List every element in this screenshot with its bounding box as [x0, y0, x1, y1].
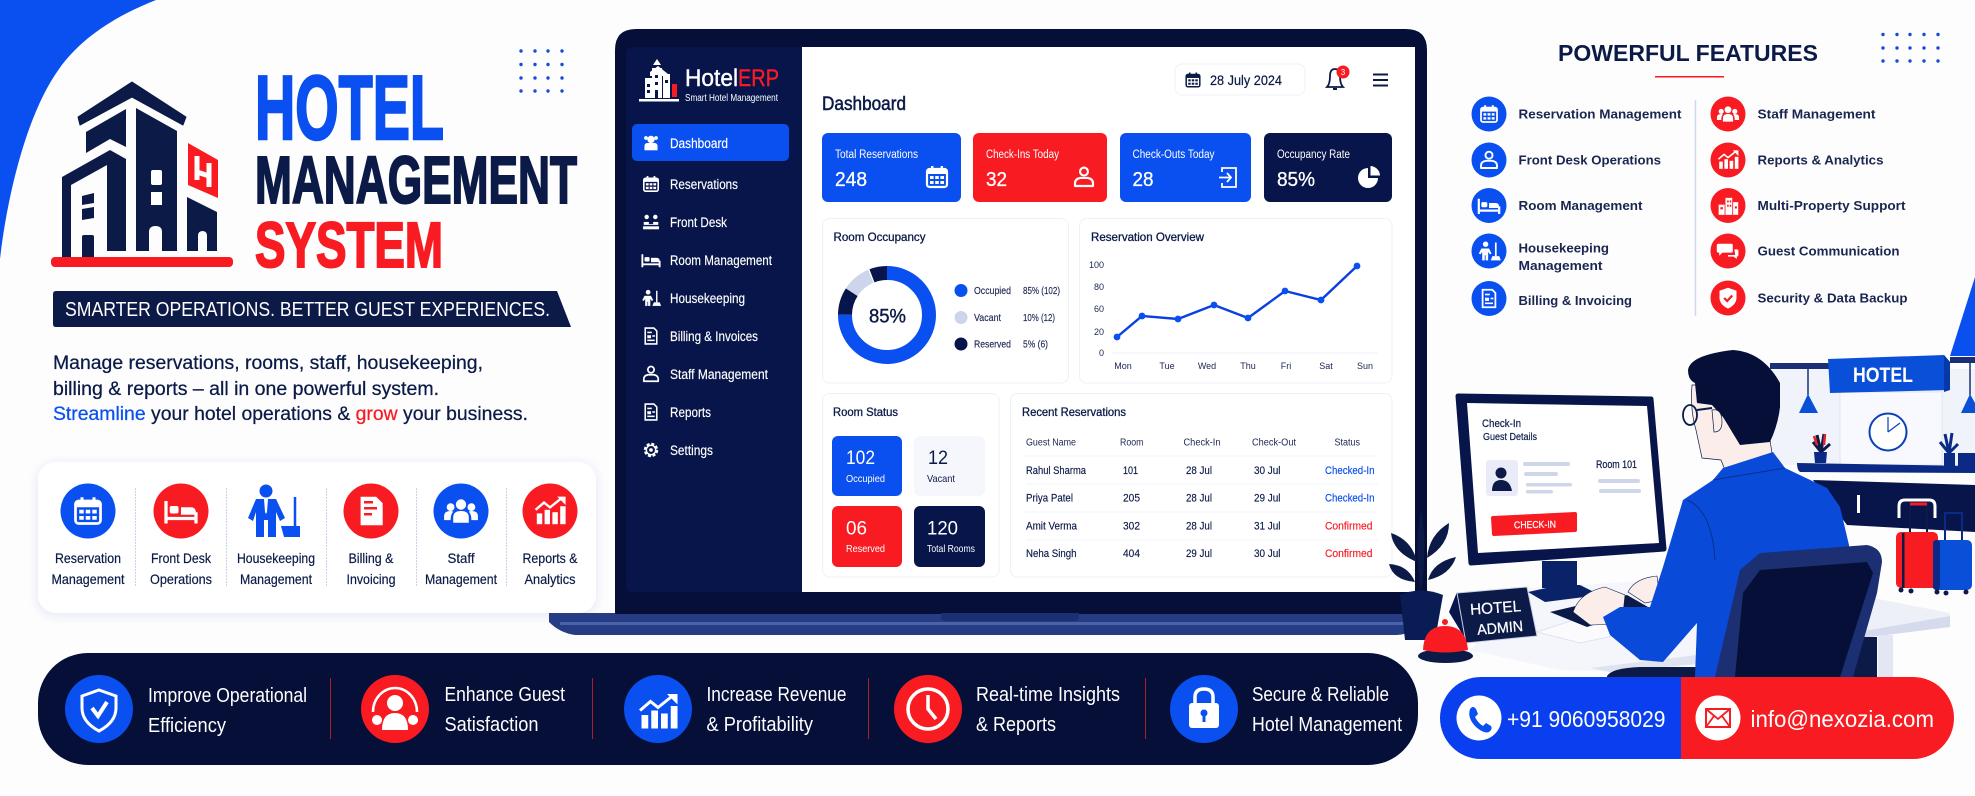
module: reports and analytics: Reports & — [522, 550, 578, 566]
lamps — [1799, 363, 1975, 413]
blue shirt — [1603, 452, 1849, 677]
benefit: operational efficiency — [65, 675, 307, 743]
panel: room occupancy — [822, 218, 1068, 383]
table rows — [1026, 465, 1374, 560]
KPI: check-outs today — [1120, 133, 1251, 202]
panel: room occupancy: Room Occupancy — [834, 230, 926, 244]
table header: Check-In — [1184, 438, 1220, 448]
illustration: hotel admin desk sign: HOTEL — [1470, 598, 1522, 619]
line chart: Sat — [1319, 361, 1333, 371]
table header: Status — [1334, 438, 1360, 448]
feature: staff management: Staff Management — [1758, 106, 1876, 122]
contact pill — [1440, 677, 1954, 759]
donut legend: 85% (102) — [1023, 285, 1060, 297]
benefit: secure and reliable: Hotel Management — [1252, 714, 1402, 736]
feature: room management — [1472, 188, 1643, 223]
decorative dots right — [1881, 33, 1940, 63]
shelf and counter — [1797, 463, 1975, 473]
title: HOTEL — [255, 58, 444, 159]
benefit: guest satisfaction: Satisfaction — [444, 714, 538, 736]
table rows: Checked-In — [1325, 492, 1374, 504]
tagline banner: SMARTER OPERATIONS. BETTER GUEST EXPERIENCES. — [65, 298, 550, 321]
intro text block: billing & reports – all in one powerful system. — [53, 379, 439, 400]
title: MANAGEMENT — [255, 143, 577, 218]
feature: reservation management — [1472, 96, 1682, 132]
panel: room status: Room Status — [833, 405, 898, 419]
module: housekeeping management: Management — [240, 571, 312, 587]
line chart: 0 — [1099, 348, 1104, 358]
monitor screen content — [1482, 418, 1641, 536]
donut legend — [954, 284, 1060, 350]
line chart: Tue — [1159, 361, 1175, 371]
table rows: 28 Jul — [1186, 492, 1212, 504]
tile occupied — [832, 436, 902, 496]
table rows: Checked-In — [1325, 465, 1374, 477]
illustration: keyboard — [1550, 595, 1648, 627]
panel: room status — [822, 394, 999, 577]
icon: hotel building logo — [51, 82, 233, 267]
KPI: check-ins today: Check-Ins Today — [986, 149, 1059, 161]
illustration: monitor — [1458, 396, 1664, 602]
face — [1692, 385, 1772, 470]
KPI: check-ins today: 32 — [986, 169, 1007, 191]
table header: Guest Name — [1026, 438, 1076, 448]
sidebar menu: Dashboard — [670, 136, 728, 151]
feature: billing and invoicing — [1472, 281, 1632, 316]
intro text block: Streamline your hotel operations & grow your business. — [53, 404, 528, 425]
table rows: Priya Patel — [1026, 492, 1073, 504]
line chart: Fri — [1281, 361, 1291, 371]
line chart: Sun — [1357, 361, 1373, 371]
feature: security and data backup — [1710, 280, 1908, 316]
feature: reservation management: Reservation Management — [1518, 106, 1682, 122]
benefit: secure and reliable — [1170, 675, 1402, 743]
illustration: person at desk — [1573, 350, 1882, 677]
module: housekeeping management — [237, 484, 315, 587]
sidebar logo: Smart Hotel Management — [685, 93, 778, 104]
module: billing and invoicing: Invoicing — [346, 571, 396, 587]
sidebar menu: Front Desk — [670, 215, 727, 230]
panel: recent reservations table — [1010, 394, 1392, 577]
table rows: 302 — [1123, 520, 1140, 532]
donut legend: 5% (6) — [1023, 338, 1048, 350]
hotel sign: HOTEL — [1853, 364, 1913, 387]
panel: recent reservations table: Recent Reservations — [1022, 405, 1126, 419]
module: billing and invoicing: Billing & — [348, 550, 394, 566]
panel: reservation overview — [1080, 218, 1392, 383]
title: SYSTEM — [255, 209, 443, 281]
feature: front desk operations: Front Desk Operations — [1518, 152, 1661, 168]
KPI: total reservations: Total Reservations — [835, 149, 918, 161]
module: staff management: Management — [425, 571, 497, 587]
module: staff management: Staff — [448, 550, 475, 566]
feature: billing and invoicing: Billing & Invoicing — [1518, 293, 1632, 308]
sidebar logo: Hotel — [685, 65, 738, 92]
KPI: occupancy rate — [1264, 133, 1392, 202]
module: reservation management: Management — [52, 571, 125, 587]
module: front desk operations: Operations — [150, 571, 212, 587]
sidebar menu: Room Management — [670, 253, 772, 268]
tile vacant: 12 — [928, 448, 948, 469]
illustration: hotel admin desk sign — [1449, 587, 1537, 643]
benefit: revenue and profitability: Increase Revenue — [706, 684, 846, 706]
sidebar logo: ERP — [738, 65, 779, 92]
sidebar menu: Housekeeping — [670, 291, 745, 306]
office chair — [1715, 545, 1882, 677]
decorative blue corner shape — [0, 0, 156, 259]
donut legend: 10% (12) — [1023, 312, 1055, 324]
phone contact: +91 9060958029 — [1507, 706, 1666, 732]
panel: feature list — [1472, 96, 1908, 316]
benefit: real-time insights — [894, 675, 1120, 743]
sidebar menu: Staff Management — [670, 367, 768, 382]
table rows: 29 Jul — [1254, 492, 1280, 504]
table header: Check-Out — [1252, 438, 1296, 448]
panel: reservation overview: Reservation Overview — [1091, 230, 1204, 244]
sidebar menu: Settings — [670, 443, 713, 458]
line chart: Thu — [1240, 361, 1256, 371]
feature: housekeeping management: Management — [1518, 258, 1603, 273]
benefit: revenue and profitability: & Profitability — [706, 714, 813, 736]
sidebar — [626, 47, 802, 592]
tile occupied: Occupied — [846, 473, 885, 485]
donut legend: Reserved — [974, 338, 1011, 350]
feature: guest communication — [1710, 234, 1900, 268]
illustration: desk plant — [1389, 510, 1456, 640]
hair — [1688, 350, 1780, 445]
hands — [1573, 587, 1625, 625]
wall clock — [1870, 414, 1906, 450]
module: reservation management — [52, 484, 125, 587]
table rows: 28 Jul — [1186, 520, 1212, 532]
feature: room management: Room Management — [1518, 198, 1643, 213]
laptop base — [549, 613, 1415, 635]
table rows: 31 Jul — [1254, 520, 1280, 532]
tile reserved — [832, 506, 902, 567]
tile total rooms: Total Rooms — [927, 543, 975, 555]
table rows: Rahul Sharma — [1026, 465, 1087, 477]
table rows: Confirmed — [1325, 548, 1372, 560]
sidebar active item — [632, 124, 789, 161]
phone contact — [1440, 677, 1681, 759]
table header — [1026, 438, 1360, 448]
benefit: secure and reliable: Secure & Reliable — [1252, 684, 1389, 706]
feature: reports and analytics — [1710, 142, 1884, 178]
table rows: 101 — [1123, 465, 1138, 477]
notification bell: 3 — [1341, 68, 1346, 77]
intro text block: Manage reservations, rooms, staff, housekeeping, — [53, 353, 483, 374]
table header: Room — [1120, 438, 1144, 448]
module: housekeeping management: Housekeeping — [237, 550, 315, 566]
table rows: Confirmed — [1325, 520, 1372, 532]
KPI: check-outs today: 28 — [1132, 169, 1154, 191]
table rows: 28 Jul — [1186, 465, 1212, 477]
date pill: 28 July 2024 — [1210, 73, 1282, 88]
tile vacant — [914, 436, 985, 496]
hotel sign — [1828, 355, 1950, 393]
small plants — [1813, 433, 1975, 467]
monitor screen content: CHECK-IN — [1514, 520, 1556, 531]
feature: security and data backup: Security & Data Backup — [1758, 290, 1908, 306]
module: reservation management: Reservation — [55, 550, 121, 566]
line chart — [1089, 260, 1378, 371]
module: front desk operations: Front Desk — [151, 550, 212, 566]
KPI: check-ins today — [973, 133, 1107, 202]
feature: multi-property support: Multi-Property Support — [1758, 198, 1906, 213]
decorative dots left — [519, 49, 564, 93]
tile total rooms — [914, 506, 985, 567]
intro text block — [53, 353, 528, 425]
tile reserved: 06 — [846, 518, 867, 540]
feature: housekeeping management — [1472, 234, 1609, 273]
features heading: POWERFUL FEATURES — [1558, 40, 1818, 66]
KPI: check-outs today: Check-Outs Today — [1132, 149, 1215, 161]
KPI: total reservations — [822, 133, 961, 202]
feature: front desk operations — [1472, 142, 1661, 178]
tagline banner — [53, 291, 571, 327]
KPI: occupancy rate: 85% — [1277, 169, 1315, 191]
KPI: total reservations: 248 — [835, 169, 867, 191]
line chart: 20 — [1094, 327, 1104, 337]
table rows: 205 — [1123, 492, 1140, 504]
feature: staff management — [1710, 96, 1876, 132]
monitor screen content: Room 101 — [1596, 459, 1637, 471]
benefits bar — [38, 653, 1418, 765]
sidebar menu: Reservations — [670, 177, 738, 192]
module: billing and invoicing — [344, 484, 398, 587]
line chart: 60 — [1094, 304, 1104, 314]
sidebar menu — [642, 136, 772, 458]
title — [255, 58, 577, 281]
email contact: info@nexozia.com — [1750, 706, 1934, 732]
illustration: hotel admin desk sign: ADMIN — [1476, 618, 1524, 639]
illustration: desk — [1470, 575, 1950, 677]
email contact — [1681, 677, 1954, 759]
module: staff management — [425, 484, 497, 587]
line chart: 100 — [1089, 260, 1104, 270]
line chart: Mon — [1114, 361, 1132, 371]
benefit: guest satisfaction — [361, 675, 565, 743]
sidebar menu: Billing & Invoices — [670, 329, 758, 344]
feature: multi-property support — [1710, 188, 1906, 223]
hamburger menu — [1373, 74, 1388, 86]
ear and glasses — [1712, 410, 1722, 432]
benefit: real-time insights: Real-time Insights — [976, 684, 1120, 706]
monitor screen content: Check-In — [1482, 418, 1521, 430]
module: reports and analytics: Analytics — [524, 571, 576, 587]
table rows: 29 Jul — [1186, 548, 1212, 560]
benefit: guest satisfaction: Enhance Guest — [444, 684, 565, 706]
table rows: 30 Jul — [1254, 465, 1280, 477]
donut chart — [845, 273, 929, 357]
notification bell — [1327, 66, 1350, 89]
feature: housekeeping management: Housekeeping — [1518, 240, 1609, 256]
tile total rooms: 120 — [927, 518, 958, 540]
illustration: reception background — [1770, 277, 1975, 596]
tile vacant: Vacant — [927, 473, 955, 485]
module: reports and analytics — [522, 484, 578, 587]
benefit: operational efficiency: Efficiency — [148, 715, 226, 737]
luggage — [1896, 504, 1972, 596]
feature: reports and analytics: Reports & Analytics — [1758, 152, 1884, 168]
line chart: Wed — [1198, 361, 1216, 371]
date pill — [1175, 64, 1305, 95]
feature: guest communication: Guest Communication — [1758, 244, 1900, 258]
benefit: operational efficiency: Improve Operational — [148, 685, 307, 707]
table rows: Amit Verma — [1026, 520, 1078, 532]
tile occupied: 102 — [846, 448, 875, 469]
sidebar menu: Reports — [670, 405, 711, 420]
benefit: revenue and profitability — [624, 675, 846, 743]
benefit: real-time insights: & Reports — [976, 714, 1056, 736]
monitor screen content: Guest Details — [1483, 431, 1537, 443]
tile reserved: Reserved — [846, 543, 885, 555]
panel: module icons card — [38, 462, 596, 613]
module: front desk operations — [150, 484, 212, 587]
table rows: 404 — [1123, 548, 1140, 560]
dashboard heading: Dashboard — [822, 94, 906, 115]
KPI: occupancy rate: Occupancy Rate — [1277, 149, 1350, 161]
donut legend: Occupied — [974, 285, 1011, 297]
donut value: 85% — [869, 306, 906, 328]
illustration: reception bell — [1418, 619, 1473, 663]
donut legend: Vacant — [974, 312, 1001, 324]
sidebar logo — [639, 59, 779, 104]
table rows: 30 Jul — [1254, 548, 1280, 560]
table rows: Neha Singh — [1026, 548, 1076, 560]
laptop bezel — [615, 29, 1427, 614]
line chart: 80 — [1094, 282, 1104, 292]
